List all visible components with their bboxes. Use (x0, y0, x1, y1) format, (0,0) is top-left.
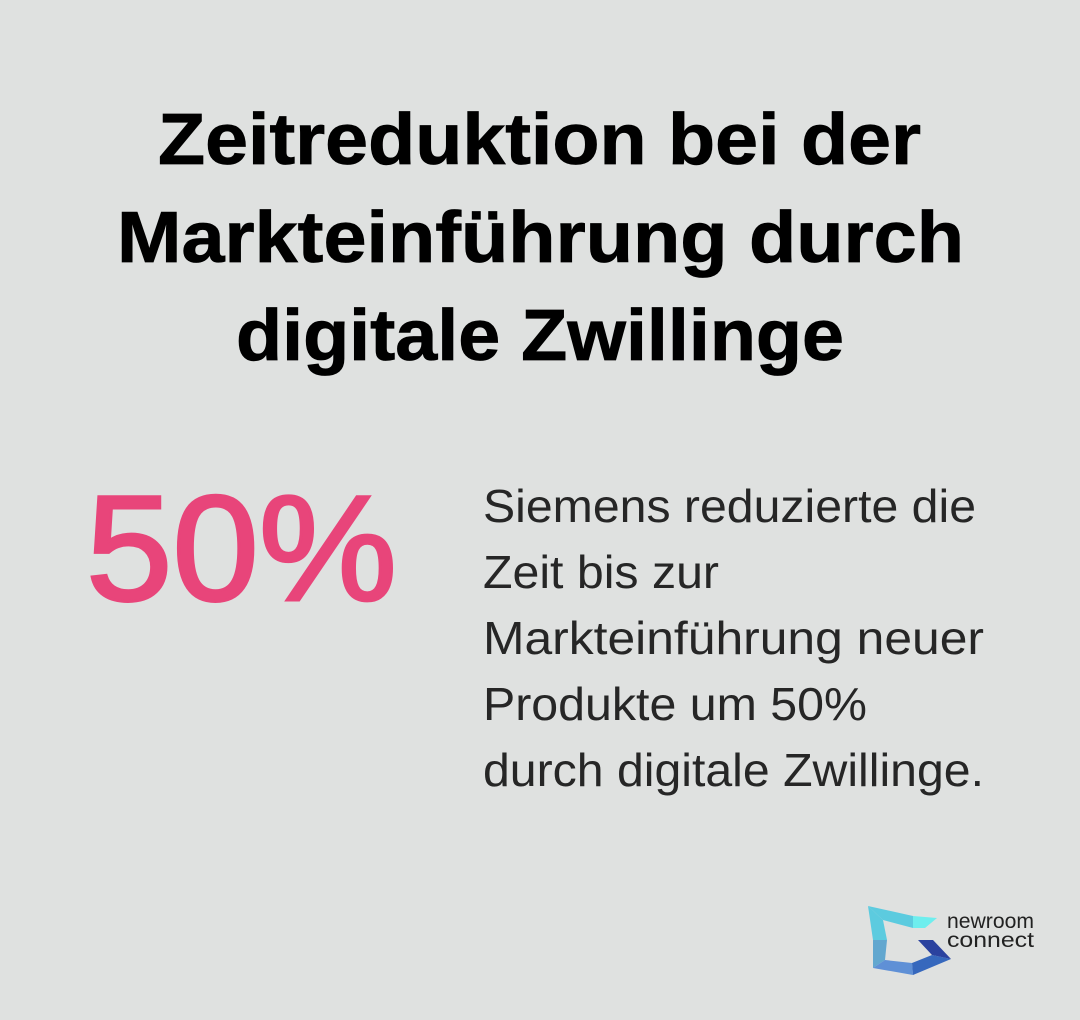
logo wordmark (947, 910, 1034, 952)
description text: Markteinführung neuer (483, 612, 984, 664)
logo wordmark: connect (947, 929, 1034, 952)
description text: durch digitale Zwillinge. (483, 744, 984, 796)
logo: newroom connect (868, 906, 1034, 975)
description text: Siemens reduzierte die (483, 480, 976, 532)
description text: Produkte um 50% (483, 678, 867, 730)
title (117, 100, 964, 376)
description text: Zeit bis zur (483, 546, 719, 598)
description text (483, 480, 984, 796)
title: digitale Zwillinge (236, 296, 844, 376)
big statistic: 50%: 50% (86, 464, 397, 632)
logo wordmark: newroom (947, 910, 1034, 933)
title: Markteinführung durch (117, 198, 964, 278)
icon: logo mark (868, 906, 951, 975)
title: Zeitreduktion bei der (158, 100, 921, 180)
